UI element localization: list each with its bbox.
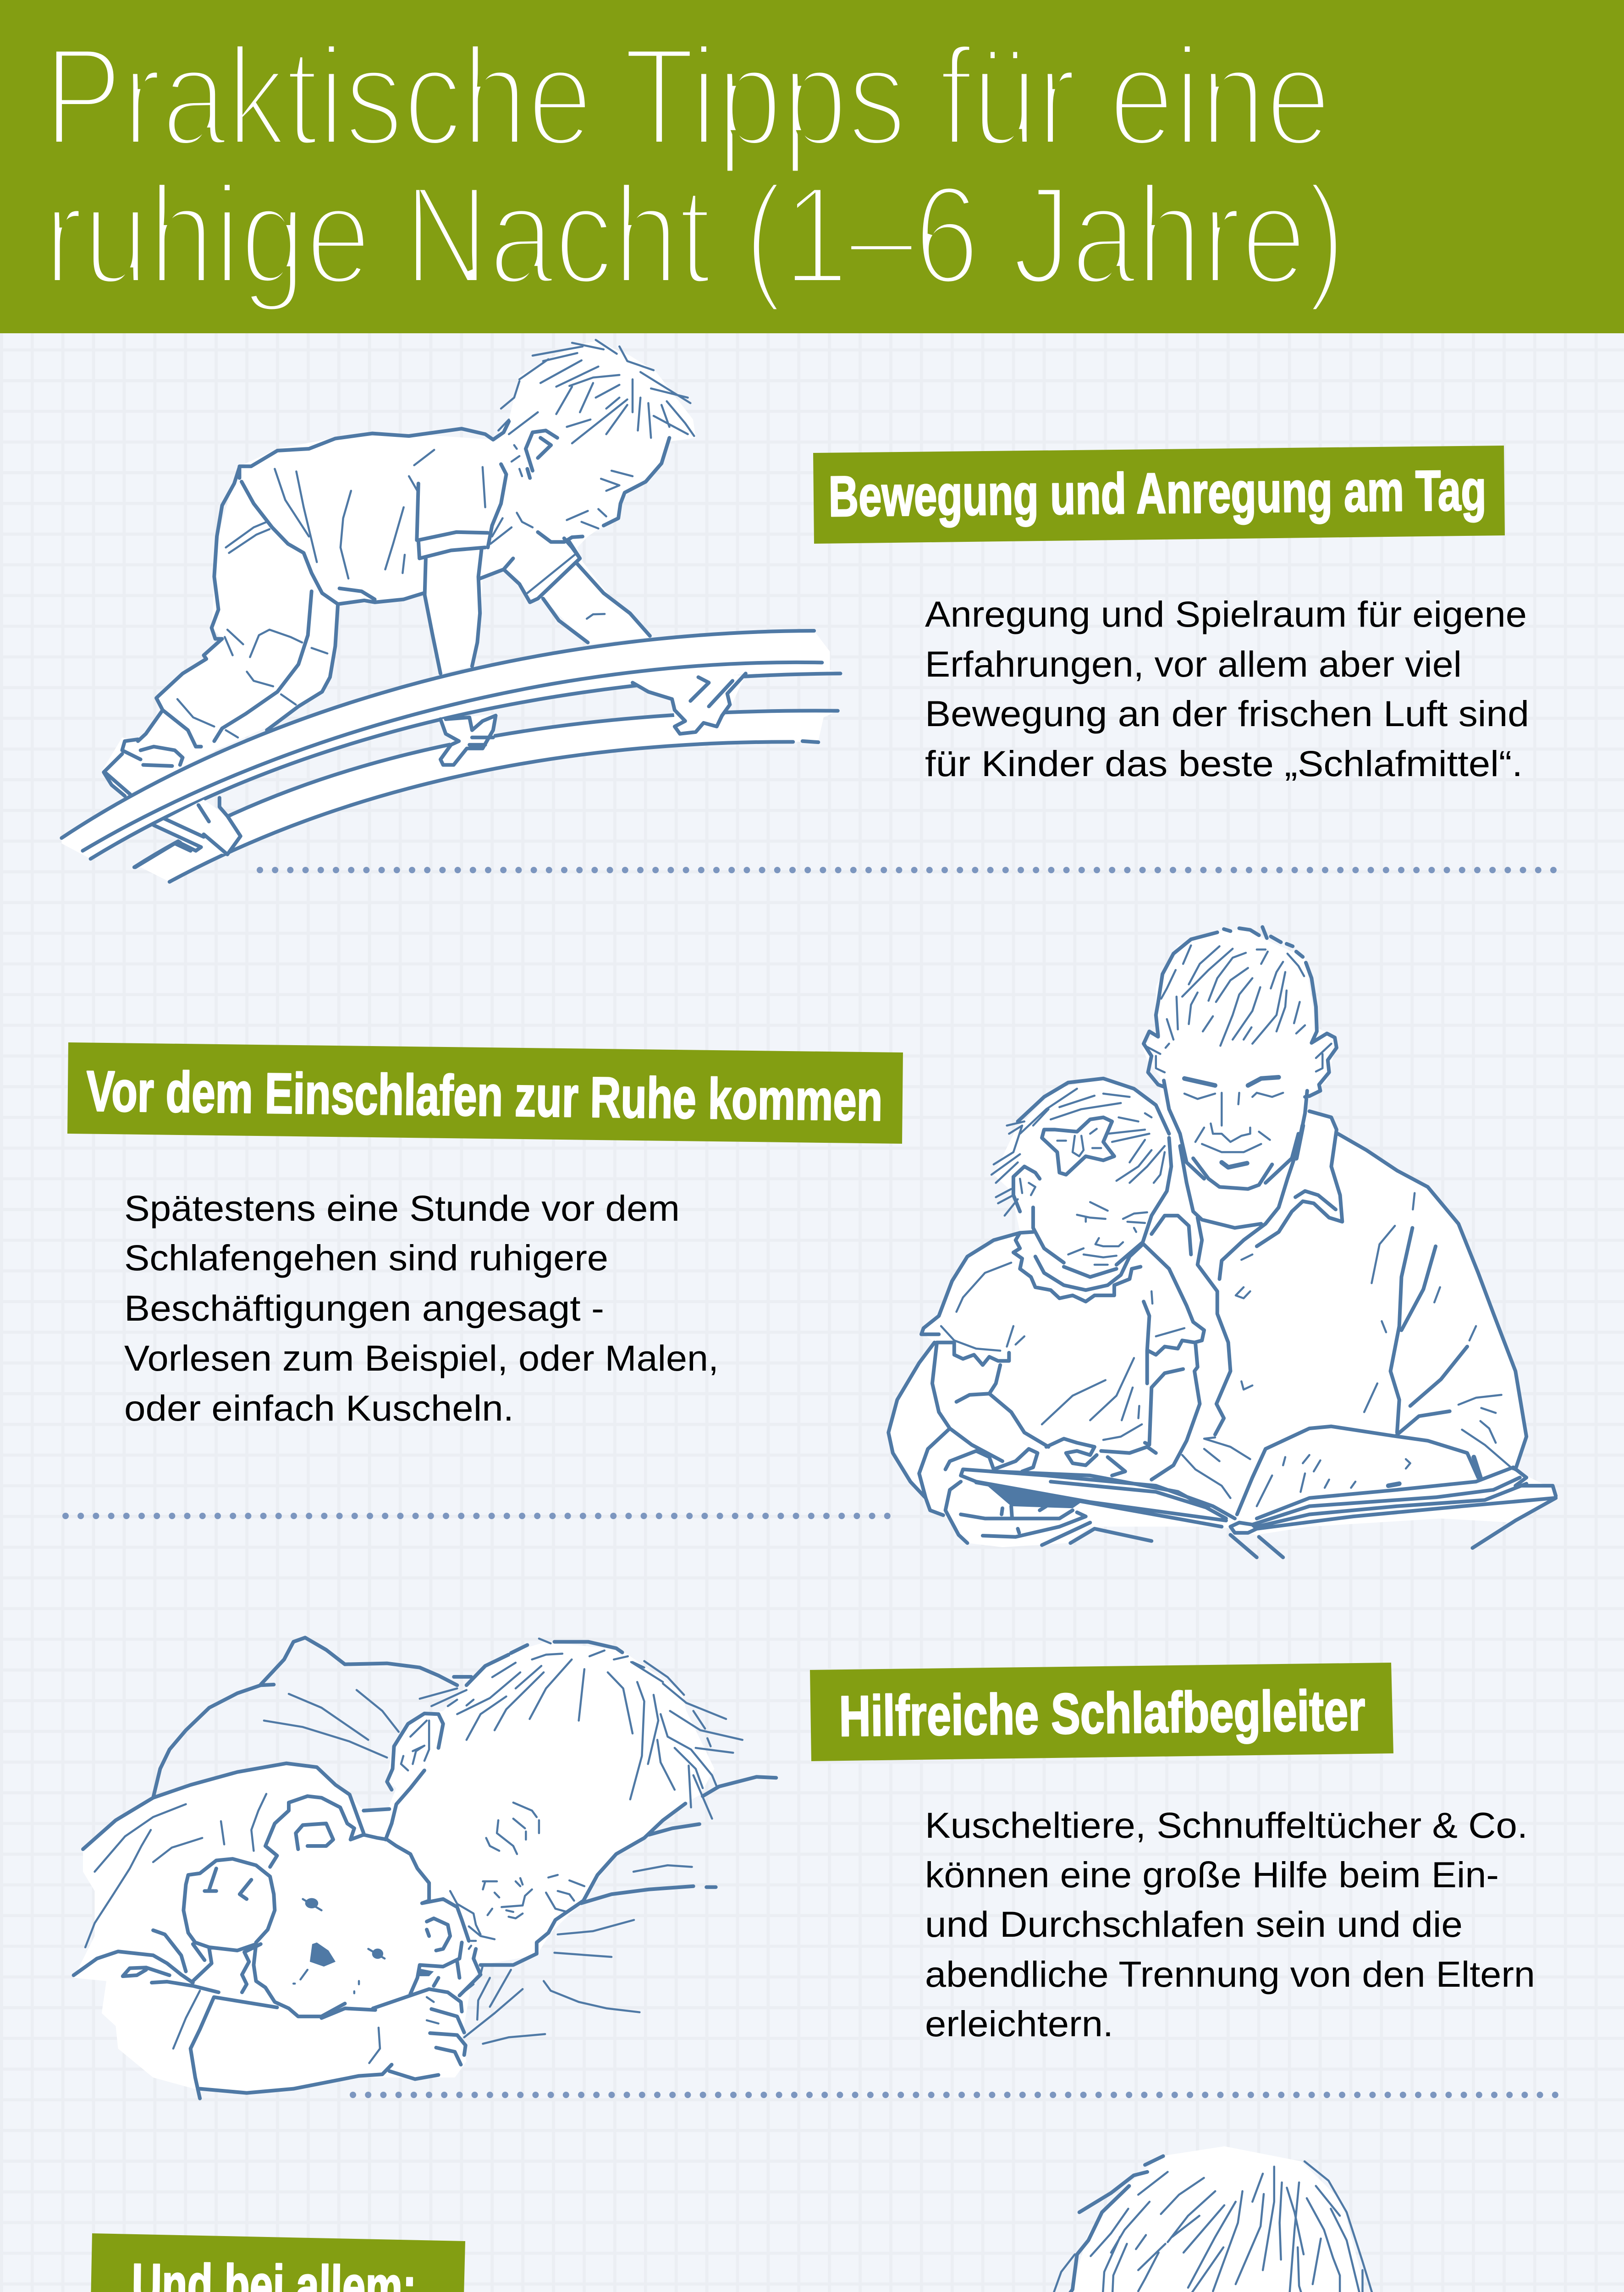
heading badge: Vor dem Einschlafen zur Ruhe kommen [67, 1042, 903, 1144]
text block: Bewegung: Bewegung an der frischen Luft sind [925, 693, 1529, 734]
illustration: tired child rubbing eyes [891, 2146, 1564, 2292]
father's brows, mouth and shading [1184, 1077, 1481, 1486]
text block: Schlafbegleiter: Kuscheltiere, Schnuffeltücher & Co. [925, 1805, 1528, 1846]
illustration: father reading to daughter [888, 927, 1556, 1557]
text block: Bewegung: für Kinder das beste „Schlafmittel“. [925, 743, 1523, 784]
child's hair, face and blanket folds [401, 1639, 743, 2044]
text block: Schlafbegleiter [925, 1805, 1535, 2044]
heading badge: Hilfreiche Schlafbegleiter: Hilfreiche Schlafbegleiter [839, 1679, 1365, 1748]
father outline [888, 927, 1526, 1515]
heading badge: Und bei allem [90, 2233, 465, 2292]
text block: Bewegung: Anregung und Spielraum für eigene [925, 594, 1527, 634]
text block: Vor dem Einschlafen: Schlafengehen sind ruhigere [124, 1237, 608, 1278]
white silhouette child and bars [61, 341, 840, 882]
title: Praktische Tipps für eine [44, 18, 1331, 176]
white silhouette [891, 2146, 1564, 2292]
heading badge: Vor dem Einschlafen zur Ruhe kommen: Vor dem Einschlafen zur Ruhe kommen [86, 1059, 883, 1133]
teddy eyes and nose [305, 1898, 434, 1976]
thin details [177, 340, 694, 738]
illustration: child climbing on a bar [61, 340, 840, 882]
text block: Vor dem Einschlafen: Vorlesen zum Beispiel, oder Malen, [124, 1338, 719, 1378]
text block: Vor dem Einschlafen [124, 1188, 719, 1428]
white silhouette [888, 929, 1555, 1547]
text block: Vor dem Einschlafen: oder einfach Kuscheln. [124, 1388, 514, 1428]
text block: Bewegung: Erfahrungen, vor allem aber viel [925, 644, 1462, 684]
white silhouette [74, 1642, 715, 2094]
illustration: sleeping child with teddy bear [74, 1637, 776, 2099]
heading badge: Bewegung und Anregung am Tag [813, 446, 1505, 544]
arm and sleeve [74, 1930, 466, 2099]
pillow and blanket [83, 1637, 471, 1849]
text block: Schlafbegleiter: abendliche Trennung von den Eltern [925, 1954, 1535, 1994]
title [44, 18, 1346, 314]
child's head [363, 1642, 776, 1965]
text block: Schlafbegleiter: können eine große Hilfe beim Ein- [925, 1854, 1499, 1895]
bars [61, 631, 840, 882]
open book [961, 1467, 1556, 1557]
father's hand below book [946, 1482, 1151, 1545]
child's hair and face [941, 1089, 1250, 1498]
text block: Bewegung [925, 594, 1529, 784]
teddy bear [183, 1796, 480, 2017]
text block: Vor dem Einschlafen: Beschäftigungen angesagt - [124, 1288, 604, 1328]
header band with title [0, 0, 1624, 333]
text block: Schlafbegleiter: und Durchschlafen sein und die [925, 1904, 1463, 1945]
father's face and hair [1145, 946, 1513, 1506]
book shadow wedge [985, 1484, 1081, 1508]
body outline [104, 421, 746, 867]
title: ruhige Nacht (1–6 Jahre) [44, 156, 1346, 314]
hair [1057, 2156, 1364, 2292]
heading badge: Hilfreiche Schlafbegleiter [810, 1663, 1393, 1761]
text block: Vor dem Einschlafen: Spätestens eine Stunde vor dem [124, 1188, 680, 1229]
white patches for hands and foot over the bars [154, 675, 746, 854]
text block: Schlafbegleiter: erleichtern. [925, 2003, 1113, 2044]
child outline [921, 1079, 1204, 1480]
